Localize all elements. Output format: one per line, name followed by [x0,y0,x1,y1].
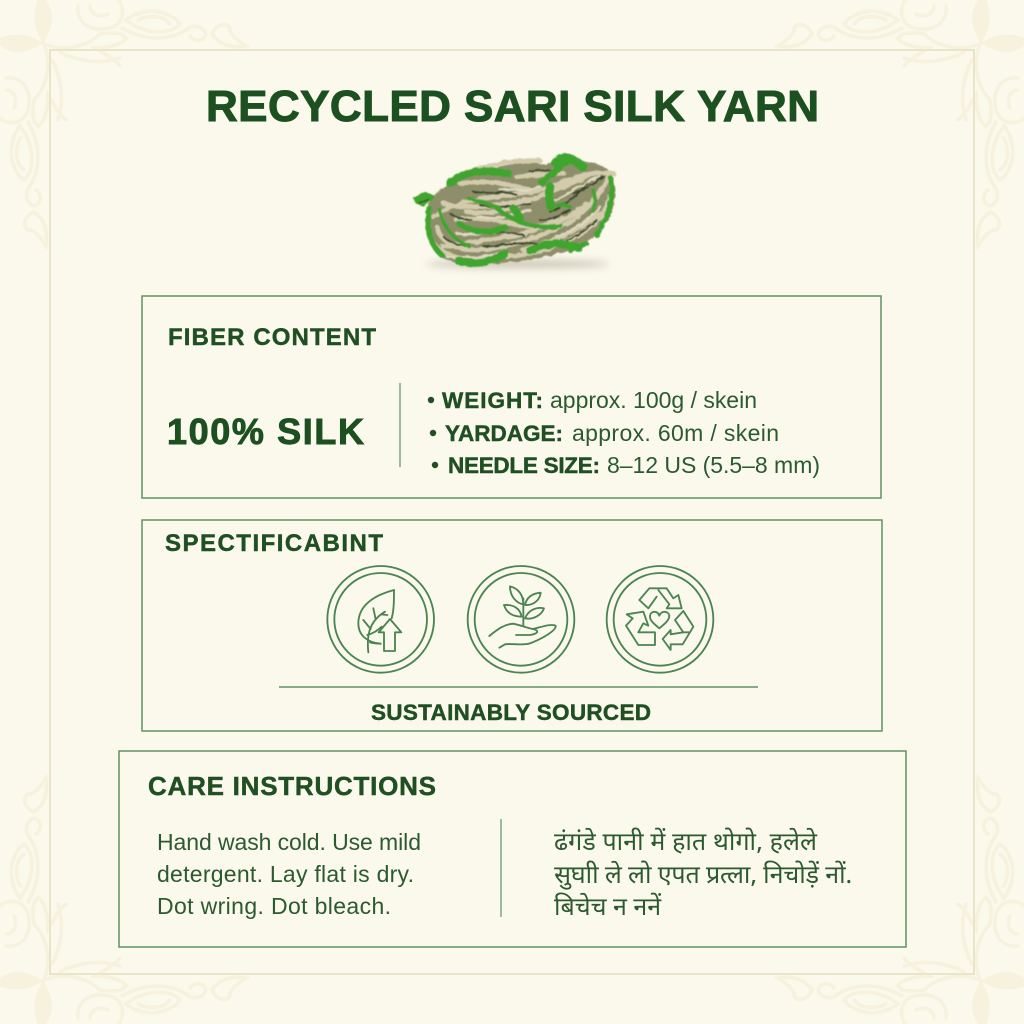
spec: needle size: NEEDLE SIZE: [448,453,600,478]
spec: weight: WEIGHT: [442,388,543,413]
spec: yardage [430,420,779,446]
care text: Hindi: बिचेच न ननें [554,891,662,926]
caption: sustainably sourced: SUSTAINABLY SOURCED [371,700,651,725]
spec: yardage: YARDAGE: [445,421,563,446]
corner ornament: top left [0,0,246,246]
care text: Hindi: ढंगंडे पानी में हात थोगो, हलेले [554,826,818,861]
panel: fiber content [142,296,881,498]
heading: care instructions: CARE INSTRUCTIONS [148,771,436,801]
icon: plant in hand [468,566,574,673]
care text: English: Hand wash cold. Use mild [157,829,421,855]
icons row [327,566,713,673]
care text: Hindi: सुघाी ले लो एपत प्रत्ला, निचोड़ें नों. [554,859,852,894]
spec list [428,387,820,478]
corner ornament: top right [778,0,1024,246]
care text: English [157,829,421,919]
title: RECYCLED SARI SILK YARN [206,82,819,131]
corner ornament: bottom right [778,778,1024,1024]
panel: specification [142,520,882,731]
corner ornament: bottom left [0,778,246,1024]
care text: Hindi [554,826,852,926]
spec: needle size: 8–12 US (5.5–8 mm) [607,452,820,478]
main figure: 100% silk: 100% SILK [167,411,364,452]
icon: recycling with heart [607,566,713,673]
care text: English: Dot wring. Dot bleach. [157,893,391,919]
heading: specification: SPECTIFICABINT [165,530,383,557]
heading: fiber content: FIBER CONTENT [168,324,376,351]
spec: yardage: approx. 60m / skein [572,420,779,446]
panel: care instructions [119,751,906,947]
spec: needle size [432,452,820,478]
icon: leaf with arrow [327,566,434,673]
shadow [426,260,610,268]
spec: weight: approx. 100g / skein [550,387,757,413]
care text: English: detergent. Lay flat is dry. [157,861,414,887]
spec: weight [428,387,757,413]
yarn skein illustration [413,158,615,268]
